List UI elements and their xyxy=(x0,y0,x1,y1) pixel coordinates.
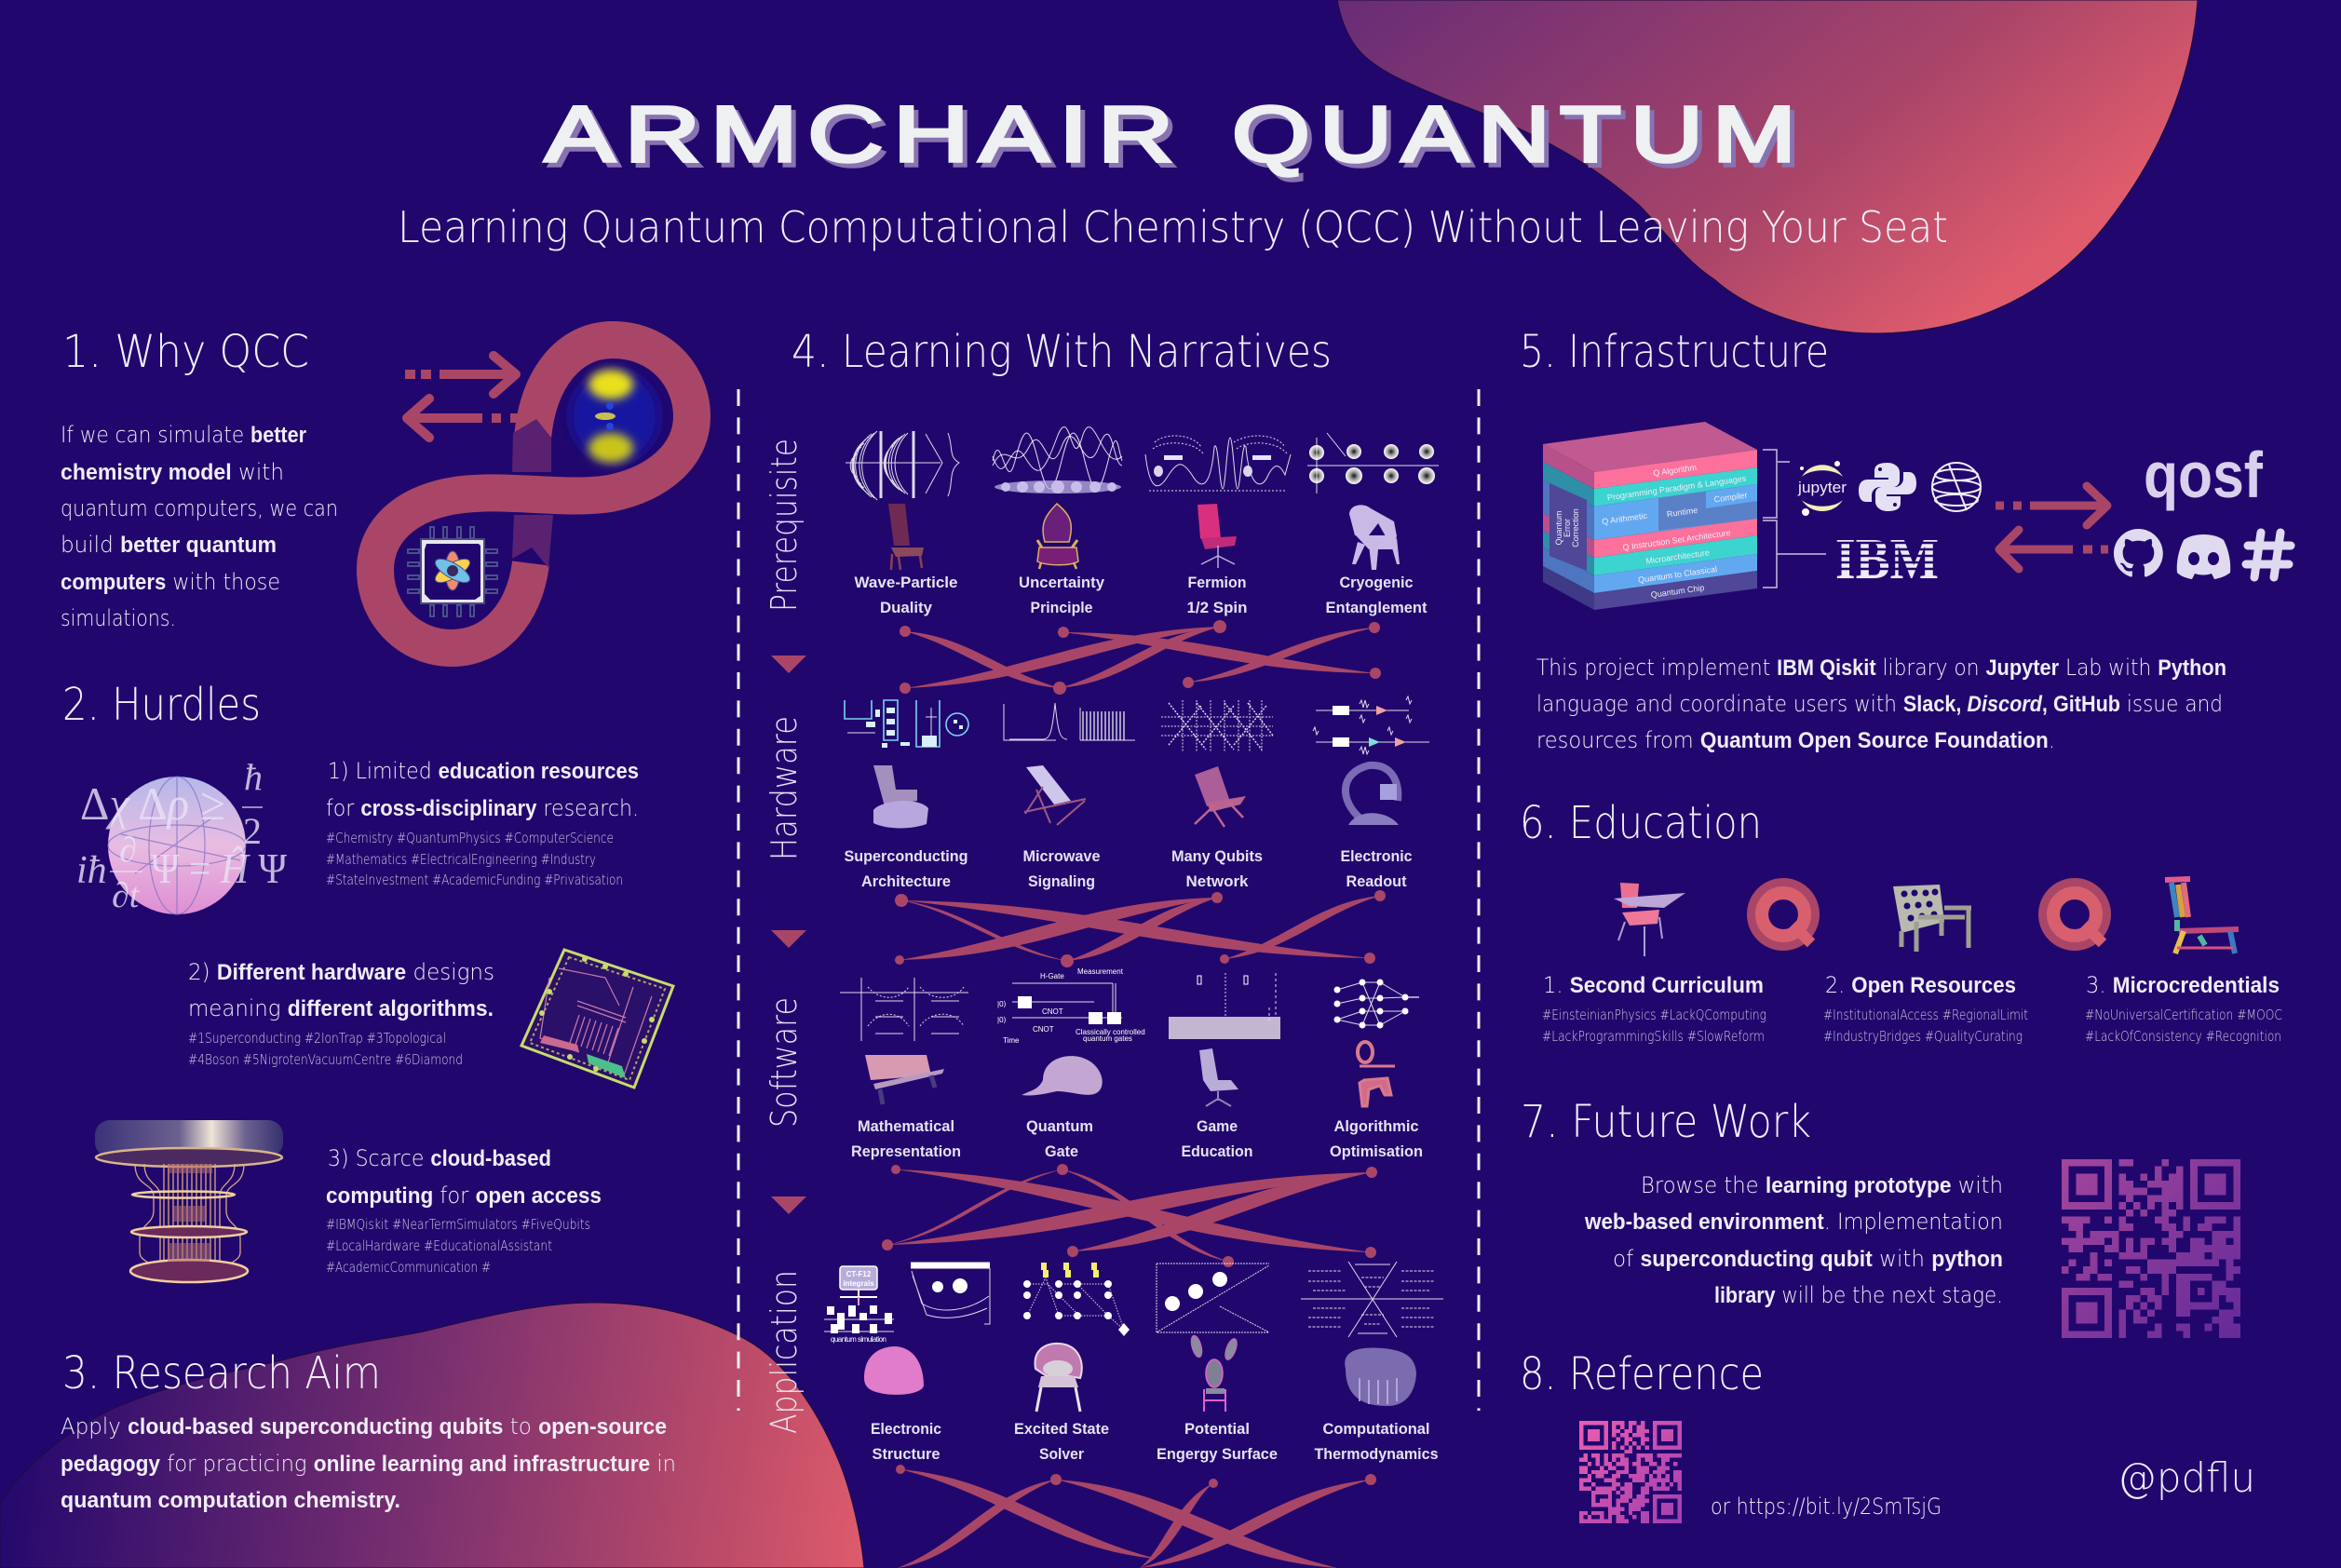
labels: software topics xyxy=(851,1117,1423,1160)
label: application: Application xyxy=(764,1270,805,1434)
label: hardware: Hardware xyxy=(764,716,805,860)
labels: software topics: Quantum xyxy=(1026,1117,1093,1135)
diagram: wave particle xyxy=(846,431,959,500)
text: hurdle 3: #IBMQiskit #NearTermSimulators #FiveQubits xyxy=(326,1216,590,1233)
chair: beanbag xyxy=(864,1346,924,1395)
text: hurdle 3 xyxy=(326,1145,602,1276)
text: hurdle 2 xyxy=(188,959,494,1068)
text: open resources: #IndustryBridges #QualityCurating xyxy=(1823,1028,2023,1045)
column divider left xyxy=(737,389,739,1411)
text: future work body: web-based environment. Implementation xyxy=(1584,1209,2003,1235)
diagram: electronic structure circuit: CT-F12 xyxy=(846,1270,872,1278)
text: future work body xyxy=(1584,1172,2003,1308)
chair: gaming pod xyxy=(1346,765,1399,825)
text: hurdle 1: #Mathematics #ElectricalEngineering #Industry xyxy=(326,851,596,868)
icon: discord xyxy=(2177,534,2230,579)
heading: future work: 7. Future Work xyxy=(1521,1096,1811,1148)
illustration: dilution refrigerator xyxy=(95,1120,283,1282)
diagram: quantum stack: Quantum Chip xyxy=(1650,583,1705,600)
diagram: thermodynamics cone xyxy=(1301,1262,1443,1337)
labels: prerequisite topics: Principle xyxy=(1030,599,1093,616)
text: hurdle 3: #LocalHardware #EducationalAssistant xyxy=(326,1237,552,1254)
text: open resources: #InstitutionalAccess #RegionalLimit xyxy=(1823,1007,2028,1023)
diagram: quantum stack: Correction xyxy=(1571,508,1580,547)
text: why QCC body: quantum computers, we can xyxy=(61,495,338,521)
diagram: quantum stack: Microarchitecture xyxy=(1645,547,1710,566)
chair: throne xyxy=(1037,504,1078,569)
panel: learning with narratives xyxy=(764,326,1443,1568)
title: QUANTUM xyxy=(1232,90,1806,178)
diagram: quantum stack: Error xyxy=(1563,519,1572,537)
diagram: quantum gate circuit: quantum gates xyxy=(1083,1034,1132,1043)
diagram: quantum stack: Quantum xyxy=(1554,510,1563,546)
text: microcredentials: #LackOfConsistency #Recognition xyxy=(2085,1028,2281,1045)
chair: painted multicolour xyxy=(2165,879,2239,953)
labels: software topics: Education xyxy=(1181,1142,1253,1160)
text: second curriculum: 1. Second Curriculum xyxy=(1543,972,1764,998)
diagram: entanglement circles xyxy=(1307,433,1439,493)
text: future work body: library will be the next stage. xyxy=(1714,1282,2003,1308)
text: second curriculum: #EinsteinianPhysics #LackQComputing xyxy=(1542,1007,1766,1023)
text: hurdle 1: 1) Limited education resources xyxy=(328,758,639,784)
heading: research aim: 3. Research Aim xyxy=(62,1347,381,1399)
labels: hardware topics: Superconducting xyxy=(844,847,968,865)
heading: hurdles: 2. Hurdles xyxy=(62,679,261,731)
illustration: bloch sphere and equations: ħ xyxy=(244,756,263,798)
arrow: prerequisite to hardware xyxy=(771,656,806,673)
labels: hardware topics: Many Qubits xyxy=(1171,847,1263,865)
labels: hardware topics: Microwave xyxy=(1022,847,1101,865)
icon: github xyxy=(2114,529,2163,576)
diagram: quantum gate circuit: Measurement xyxy=(1077,967,1124,976)
labels: hardware topics: Architecture xyxy=(861,872,951,890)
title: ARMCHAIR xyxy=(545,90,1184,178)
labels: prerequisite topics: Uncertainty xyxy=(1019,574,1105,591)
icon: jupyter: jupyter xyxy=(1797,479,1847,496)
labels: application topics: Excited State xyxy=(1014,1420,1109,1438)
heading: education: 6. Education xyxy=(1520,797,1762,849)
illustration: bloch sphere and equations xyxy=(76,756,287,915)
text: why QCC body: chemistry model with xyxy=(61,459,284,485)
text: hurdle 2: 2) Different hardware designs xyxy=(188,959,494,985)
text: research aim body: pedagogy for practicing online learning and infrastructure in xyxy=(61,1451,676,1477)
icon: qiskit sphere xyxy=(1932,463,1981,511)
panel: future work xyxy=(1521,1096,2240,1334)
label: software: Software xyxy=(764,997,805,1128)
labels: application topics: Solver xyxy=(1039,1445,1084,1463)
subtitle: Learning Quantum Computational Chemistry (QCC) Without Leaving Your Seat xyxy=(398,202,1948,252)
diagram: mathematical representation xyxy=(840,978,968,1041)
text: infrastructure body: This project implement IBM Qiskit library on Jupyter Lab with Python xyxy=(1536,655,2226,681)
diagram: quantum gate circuit: CNOT xyxy=(1042,1007,1063,1016)
diagram: electronic structure circuit: quantum simulation xyxy=(831,1335,886,1344)
text: research aim body: Apply cloud-based superconducting qubits to open-source xyxy=(61,1413,667,1440)
labels: hardware topics: Signaling xyxy=(1028,872,1095,890)
panel: research aim xyxy=(61,1347,676,1513)
chair: excited armchair xyxy=(1035,1344,1082,1412)
diagram: quantum stack: Quantum to Classical xyxy=(1638,564,1718,585)
panel: education xyxy=(1520,797,2282,1045)
text: short link: or https://bit.ly/2SmTsjG xyxy=(1711,1494,1942,1520)
labels: software topics: Representation xyxy=(851,1142,961,1160)
labels: prerequisite topics: Entanglement xyxy=(1326,599,1428,616)
label: prerequisite: Prerequisite xyxy=(764,439,805,612)
text: microcredentials: 3. Microcredentials xyxy=(2086,972,2280,998)
diagram: electronic structure circuit: integrals xyxy=(843,1279,874,1288)
labels: prerequisite topics: 1/2 Spin xyxy=(1186,599,1248,616)
diagram: game screen xyxy=(1169,973,1280,1039)
labels: software topics: Mathematical xyxy=(858,1117,954,1135)
diagram: uncertainty waves xyxy=(993,426,1122,493)
labels: software topics: Gate xyxy=(1045,1142,1078,1160)
text: why QCC body: If we can simulate better xyxy=(61,422,306,448)
icon: orbital density xyxy=(570,370,659,463)
chair: gaming xyxy=(1199,1048,1238,1106)
labels: application topics: Thermodynamics xyxy=(1315,1445,1438,1463)
labels: application topics: Electronic xyxy=(871,1420,941,1438)
diagram: neural network xyxy=(1333,980,1419,1028)
blob: bottom left xyxy=(0,1303,864,1568)
text: open resources xyxy=(1823,972,2028,1045)
links: application to bottom xyxy=(896,1465,1376,1568)
text: second curriculum: #LackProgrammingSkills #SlowReform xyxy=(1542,1028,1765,1045)
heading: infrastructure: 5. Infrastructure xyxy=(1520,326,1829,378)
title: QUANTUM xyxy=(1237,95,1810,182)
text: microcredentials xyxy=(2085,972,2282,1045)
arrow: hardware to software xyxy=(771,930,806,948)
diagram: quantum gate circuit: Classically controlled xyxy=(1076,1028,1145,1036)
arrow: from community xyxy=(1999,530,2108,569)
text: research aim body xyxy=(61,1413,676,1513)
row: software xyxy=(840,967,1423,1160)
text: infrastructure body: resources from Quantum Open Source Foundation. xyxy=(1536,727,2055,753)
labels: prerequisite topics: Fermion xyxy=(1188,574,1246,591)
labels: prerequisite topics: Wave-Particle xyxy=(855,574,957,591)
row: application xyxy=(824,1262,1443,1463)
illustration: bloch sphere and equations: ∂ xyxy=(119,831,137,870)
text: infrastructure body: language and coordinate users with Slack, Discord, GitHub issue and xyxy=(1536,691,2223,717)
text: hurdle 1 xyxy=(326,758,639,888)
text: why QCC body: simulations. xyxy=(61,605,176,631)
chair: curly lounge xyxy=(1022,1056,1103,1096)
diagram: microwave signaling xyxy=(1004,703,1135,740)
chair: cactus xyxy=(1189,1334,1239,1412)
diagram: quantum gate circuit: Time xyxy=(1003,1036,1020,1045)
illustration: bloch sphere and equations: iħ xyxy=(76,849,107,892)
chair: algorithmic xyxy=(1358,1042,1395,1106)
diagram: fermion potential xyxy=(1145,436,1291,491)
text: microcredentials: #NoUniversalCertification #MOOC xyxy=(2085,1007,2282,1023)
diagram: quantum stack: Programming Paradigm & Languages xyxy=(1606,474,1747,502)
text: second curriculum xyxy=(1542,972,1766,1045)
labels: application topics: Engergy Surface xyxy=(1157,1445,1278,1463)
chair: pink folding xyxy=(1195,766,1246,827)
illustration: bloch sphere and equations: 2 xyxy=(243,810,262,852)
labels: application topics xyxy=(871,1420,1438,1463)
labels: software topics: Algorithmic xyxy=(1333,1117,1419,1135)
chair: wooden xyxy=(888,504,924,570)
labels: software topics: Game xyxy=(1197,1117,1238,1135)
icon: Q arrow xyxy=(2049,888,2103,943)
labels: application topics: Structure xyxy=(872,1445,940,1463)
QR code: reference xyxy=(1579,1421,1682,1523)
icon: slack hash xyxy=(2246,533,2291,577)
links: software to application xyxy=(882,1164,1377,1267)
panel: reference xyxy=(1520,1348,2255,1521)
diagram: electronic structure circuit xyxy=(824,1265,990,1344)
title: ARMCHAIR xyxy=(549,95,1188,182)
text: hurdle 2: meaning different algorithms. xyxy=(188,995,494,1021)
illustration: superconducting chip xyxy=(521,950,673,1088)
diagram: quantum stack: Compiler xyxy=(1713,491,1748,504)
chair: office xyxy=(1198,504,1237,568)
title xyxy=(545,90,1810,182)
chair: bench xyxy=(865,1055,944,1104)
text: future work body: of superconducting qubit with python xyxy=(1613,1246,2003,1272)
diagram: quantum gate circuit: H-Gate xyxy=(1040,972,1064,980)
text: research aim body: quantum computation chemistry. xyxy=(61,1488,400,1513)
arrow: to left xyxy=(407,399,518,438)
chair: perforated xyxy=(1893,885,1971,952)
text: hurdle 1: #StateInvestment #AcademicFunding #Privatisation xyxy=(326,872,623,888)
labels: prerequisite topics xyxy=(855,574,1428,616)
heading: learning with narratives: 4. Learning With Narratives xyxy=(792,326,1332,378)
logo: qosf: qosf xyxy=(2144,439,2264,511)
labels: hardware topics: Readout xyxy=(1346,872,1407,890)
row: prerequisite xyxy=(846,426,1439,616)
diagram: quantum gate circuit: |0⟩ xyxy=(997,1016,1007,1024)
panel: why QCC xyxy=(61,326,692,648)
labels: software topics: Optimisation xyxy=(1330,1142,1423,1160)
diagram: excited state network xyxy=(1023,1263,1130,1336)
diagram: superconducting architecture xyxy=(845,700,968,748)
text: hurdle 2: #1Superconducting #2IonTrap #3Topological xyxy=(188,1030,446,1047)
row: hardware xyxy=(844,696,1429,890)
text: hurdle 1: #Chemistry #QuantumPhysics #ComputerScience xyxy=(326,830,614,846)
heading: why QCC: 1. Why QCC xyxy=(62,326,309,378)
chair: plastic xyxy=(1349,505,1400,570)
chair: school desk xyxy=(1614,883,1685,956)
diagram: quantum stack xyxy=(1543,422,1826,610)
icon: python xyxy=(1859,463,1916,511)
QR code: prototype xyxy=(2062,1159,2240,1338)
diagram: potential energy surface xyxy=(1157,1264,1269,1332)
text: why QCC body: build better quantum xyxy=(61,532,277,558)
diagram: quantum stack: Q Instruction Set Architecture xyxy=(1622,528,1731,552)
illustration: bloch sphere and equations: ∂t xyxy=(112,876,141,915)
labels: application topics: Potential xyxy=(1184,1420,1250,1438)
text: infrastructure body xyxy=(1536,655,2226,753)
diagram: quantum gate circuit: CNOT xyxy=(1033,1025,1054,1034)
icon: Q arrow xyxy=(1758,888,1811,943)
text: future work body: Browse the learning prototype with xyxy=(1641,1172,2003,1198)
logo: IBM: IBM xyxy=(1835,528,1939,591)
diagram: quantum gate circuit: |0⟩ xyxy=(997,1000,1007,1008)
text: hurdle 3: #AcademicCommunication # xyxy=(326,1259,491,1276)
text: hurdle 1: for cross-disciplinary research. xyxy=(326,795,639,821)
diagram: quantum stack: Runtime xyxy=(1666,506,1698,519)
diagram: quantum gate circuit xyxy=(997,967,1145,1045)
icon: infinity loop xyxy=(375,340,692,648)
icon: quantum chip with atom xyxy=(408,527,497,616)
chair: deck xyxy=(1024,765,1086,825)
links: hardware to software xyxy=(895,890,1386,967)
arrow: to community xyxy=(1996,486,2107,525)
icon: jupyter xyxy=(1797,461,1847,516)
diagram: quantum stack: Q Arithmetic xyxy=(1602,511,1648,526)
links: prerequisite to hardware xyxy=(900,620,1381,695)
diagram: quantum stack: Q Algorithm xyxy=(1653,463,1698,478)
panel: infrastructure xyxy=(1520,326,2291,753)
diagram: qubit lattice xyxy=(1161,700,1273,752)
labels: hardware topics: Electronic xyxy=(1341,847,1412,865)
text: author handle: @pdflu xyxy=(2118,1454,2255,1502)
text: hurdle 3: computing for open access xyxy=(326,1183,602,1209)
column divider right xyxy=(1477,389,1481,1411)
text: why QCC body: computers with those xyxy=(61,569,280,595)
blob: top right xyxy=(1337,0,2198,333)
heading: reference: 8. Reference xyxy=(1520,1348,1764,1400)
labels: hardware topics: Network xyxy=(1186,872,1249,890)
text: why QCC body xyxy=(61,422,338,631)
labels: hardware topics xyxy=(844,847,1412,890)
illustration: bloch sphere and equations: Ψ = Ĥ Ψ xyxy=(151,845,287,892)
illustration: bloch sphere and equations: Δχ Δρ ≥ xyxy=(80,777,225,830)
arrow: to right xyxy=(405,356,516,394)
text: open resources: 2. Open Resources xyxy=(1825,972,2016,998)
labels: application topics: Computational xyxy=(1322,1420,1430,1438)
labels: prerequisite topics: Duality xyxy=(880,599,933,616)
diagram: electronic readout xyxy=(1313,696,1429,754)
panel: hurdles xyxy=(62,679,673,1282)
labels: prerequisite topics: Cryogenic xyxy=(1339,574,1414,591)
chair: wavy armchair xyxy=(1345,1348,1416,1406)
chair: spa xyxy=(873,765,928,828)
text: hurdle 3: 3) Scarce cloud-based xyxy=(328,1145,551,1171)
arrow: software to application xyxy=(771,1196,806,1214)
text: hurdle 2: #4Boson #5NigrotenVacuumCentre #6Diamond xyxy=(188,1051,463,1068)
